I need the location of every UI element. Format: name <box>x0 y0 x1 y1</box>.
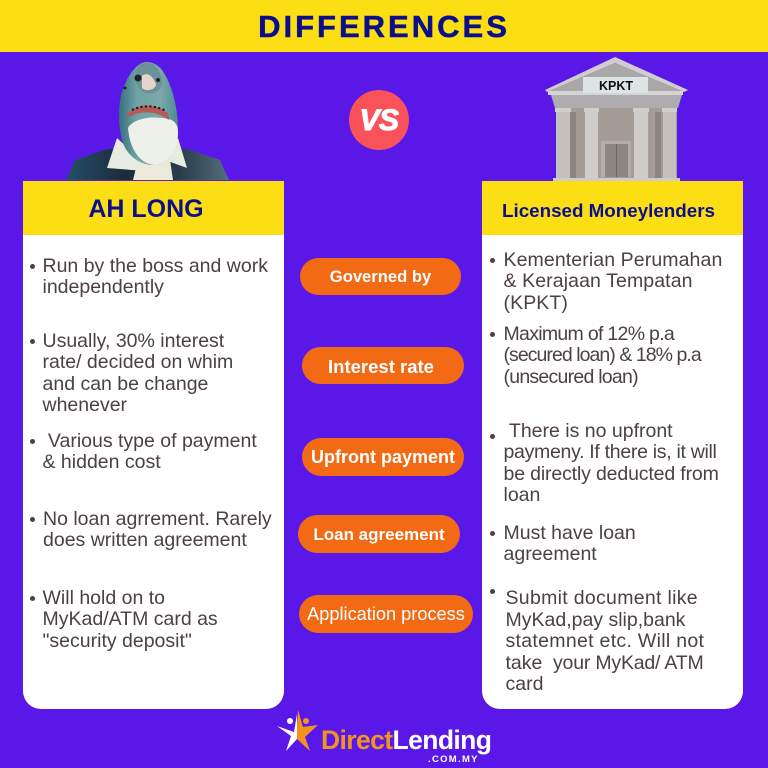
collar right <box>165 138 187 168</box>
label: Governed by <box>300 258 461 295</box>
text: Ah Long interest: and can be change <box>42 373 208 395</box>
panel body <box>482 235 743 709</box>
text: Licensed application: Submit document like <box>506 587 698 609</box>
icon: VS badge <box>349 90 409 150</box>
icon: shark in suit <box>66 62 229 180</box>
title banner <box>0 0 768 52</box>
text: Licensed application: statemnet etc. Will not <box>506 630 704 652</box>
title banner: DIFFERENCES <box>258 9 510 44</box>
collar left <box>107 138 145 171</box>
panel body <box>23 235 284 709</box>
text: Ah Long interest: Usually, 30% interest <box>42 330 224 352</box>
shirt <box>133 160 173 180</box>
text: Ah Long governance <box>30 255 268 298</box>
text: Licensed payment: There is no upfront <box>509 420 673 442</box>
text: Ah Long payment: Various type of payment <box>48 430 257 452</box>
panel: Licensed Moneylenders <box>482 181 743 709</box>
text: Licensed agreement: agreement <box>504 543 597 565</box>
text: Ah Long payment: & hidden cost <box>42 451 161 473</box>
panel heading <box>482 181 743 235</box>
text: Licensed interest: Maximum of 12% p.a <box>504 323 674 345</box>
panel: Ah Long <box>23 181 284 709</box>
label: Application process: Application process <box>307 604 465 624</box>
text: Licensed governance: Kementerian Perumahan <box>504 249 722 271</box>
text: Ah Long application <box>30 587 218 652</box>
text: Ah Long application: Will hold on to <box>42 587 165 609</box>
wordmark: DirectLending <box>321 725 491 755</box>
text: Licensed interest: (unsecured loan) <box>504 366 638 388</box>
label: Application process <box>299 595 473 633</box>
panel heading: AH LONG <box>88 195 204 223</box>
text: Ah Long governance: independently <box>42 276 164 298</box>
text: Licensed application: card <box>506 673 543 695</box>
icon: VS badge: VS <box>359 104 399 137</box>
text: Licensed application: MyKad,pay slip,bank <box>506 608 685 630</box>
text: Ah Long interest <box>30 330 233 416</box>
text: Ah Long application: MyKad/ATM card as <box>42 608 218 630</box>
domain: .COM.MY <box>428 754 479 765</box>
text: Licensed agreement <box>490 522 636 565</box>
text: Licensed governance <box>490 249 722 314</box>
text: Ah Long agreement: No loan agrrement. Rarely <box>43 508 272 530</box>
text: Licensed interest: (secured loan) & 18% p.a <box>504 344 701 366</box>
label: Loan agreement <box>298 515 460 553</box>
label: Interest rate <box>302 347 464 384</box>
panel heading <box>23 181 284 235</box>
icon: star figure <box>277 710 318 751</box>
text: Licensed interest <box>490 323 702 388</box>
text: Licensed payment <box>490 420 719 506</box>
logo: DirectLending <box>277 710 491 765</box>
text: Ah Long application: "security deposit" <box>42 630 192 652</box>
text: Licensed payment: loan <box>504 484 540 506</box>
label: Upfront payment <box>302 438 464 476</box>
label: Governed by: Governed by <box>330 267 431 286</box>
text: Licensed application: take your MyKad/ ATM <box>506 652 704 674</box>
text: Licensed application <box>490 587 704 695</box>
text: Licensed governance: (KPKT) <box>504 292 568 314</box>
text: Licensed payment: paymeny. If there is, it will <box>504 441 717 463</box>
text: Ah Long interest: rate/ decided on whim <box>42 351 233 373</box>
suit <box>66 149 229 180</box>
icon: KPKT bank building <box>545 57 688 181</box>
text: Ah Long agreement: does written agreement <box>43 529 247 551</box>
text: Ah Long interest: whenever <box>42 394 127 416</box>
text: Licensed agreement: Must have loan <box>504 522 636 544</box>
panel heading: Licensed Moneylenders <box>502 200 715 221</box>
label: Loan agreement: Loan agreement <box>313 525 445 544</box>
icon: KPKT bank building: KPKT <box>599 79 633 93</box>
text: Ah Long governance: Run by the boss and work <box>42 255 268 277</box>
text: Ah Long payment <box>30 430 257 473</box>
text: Licensed governance: & Kerajaan Tempatan <box>504 270 693 292</box>
label: Upfront payment: Upfront payment <box>311 447 455 467</box>
text: Ah Long agreement <box>30 508 272 551</box>
text: Licensed payment: be directly deducted from <box>504 463 719 485</box>
label: Interest rate: Interest rate <box>328 356 434 377</box>
